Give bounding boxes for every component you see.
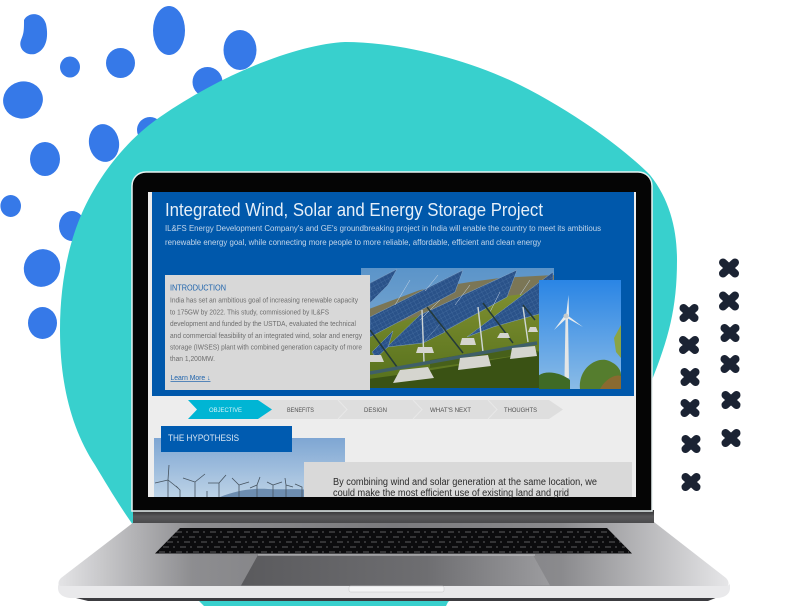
step navigation: BENEFITS: [287, 407, 314, 414]
decorative blue dots: [0, 6, 256, 339]
intro body: than 1,200MW.: [170, 356, 215, 363]
step navigation: [188, 400, 563, 419]
hypothesis heading: THE HYPOTHESIS: [168, 433, 239, 443]
learn more link: Learn More ↓: [170, 375, 210, 382]
step navigation: THOUGHTS: [504, 407, 538, 414]
intro body: development and funded by the USTDA, evaluated the technical: [170, 321, 356, 328]
decorative dark crosses: [683, 262, 736, 487]
page subtitle: renewable energy goal, while connecting more people to more reliable, affordable, efficient and clean energy: [165, 237, 542, 247]
laptop base shadow: [72, 597, 718, 601]
laptop front edge: [58, 583, 730, 598]
trackpad: [241, 555, 550, 586]
intro card: [165, 275, 370, 390]
intro heading: INTRODUCTION: [170, 282, 226, 292]
website screen: [148, 192, 636, 499]
hypothesis text: [333, 477, 598, 499]
hypothesis text: By combining wind and solar generation at the same location, we: [333, 477, 598, 488]
page subtitle: IL&FS Energy Development Company's and GE's groundbreaking project in India will enable the country to meet its ambitious: [165, 223, 601, 233]
intro body: and commercial feasibility of an integrated wind, solar and energy: [170, 333, 362, 340]
hinge: [133, 510, 654, 523]
intro body: India has set an ambitious goal of increasing renewable capacity: [170, 298, 358, 304]
laptop: [58, 172, 730, 601]
step navigation: DESIGN: [364, 407, 387, 414]
hero panel: [152, 192, 634, 396]
page title: Integrated Wind, Solar and Energy Storage Project: [165, 200, 543, 220]
solar photo: [361, 268, 554, 388]
hypothesis text: could make the most efficient use of existing land and grid: [333, 488, 569, 499]
hypothesis photo: [154, 438, 345, 497]
laptop deck: [58, 522, 729, 587]
laptop notch: [349, 586, 444, 592]
hypothesis heading bar: [161, 426, 292, 452]
keyboard: [155, 528, 632, 554]
background blob: teal: [60, 42, 677, 606]
intro body: storage (IWSES) plant with combined generation capacity of more: [170, 344, 362, 352]
intro body: [170, 298, 362, 363]
hypothesis text card: [304, 462, 632, 497]
laptop screen bezel: [132, 172, 652, 511]
step navigation: OBJECTIVE: [209, 407, 243, 414]
wind turbine photo: [538, 280, 621, 389]
page subtitle: [165, 223, 601, 247]
page background: [148, 192, 636, 497]
intro body: to 175GW by 2022. This study, commissioned by IL&FS: [170, 310, 329, 316]
step navigation: WHAT'S NEXT: [430, 407, 471, 414]
